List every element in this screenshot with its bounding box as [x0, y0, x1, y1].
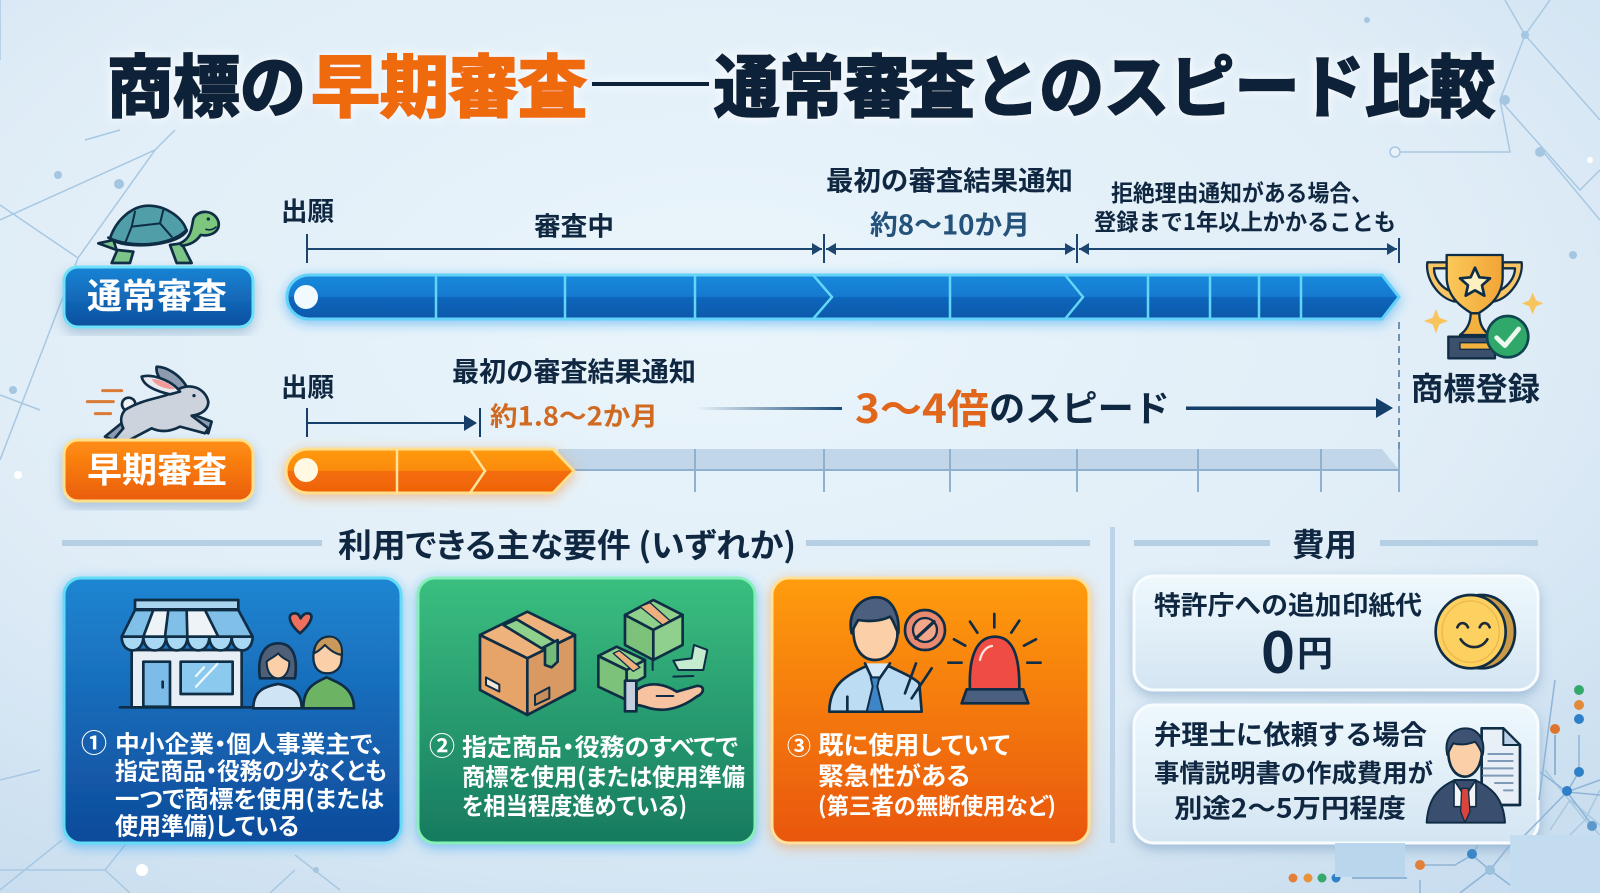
icon: store and couple: [120, 600, 354, 708]
panel: attorney fee: 別途2〜5万円程度: [1174, 788, 1406, 826]
corner patches: [1288, 835, 1600, 893]
panel: requirement 2: を相当程度進めている): [462, 786, 687, 822]
timeline labels: normal: 審査中: [534, 206, 614, 244]
label: trademark registration: 商標登録: [1411, 364, 1540, 410]
label: fast examination: 早期審査: [87, 442, 227, 494]
timeline labels: fast: [281, 350, 696, 434]
title: 商標の: [107, 32, 306, 132]
timeline labels: normal: [281, 160, 1396, 244]
timeline labels: normal: 最初の審査結果通知: [826, 160, 1073, 198]
bar: normal examination timeline: [287, 275, 1399, 319]
panel: requirement 1: ①: [81, 724, 107, 760]
panel: requirement 3: ③: [787, 726, 811, 762]
panel: requirement 2: 指定商品・役務のすべてで: [462, 728, 738, 762]
timeline labels: normal: 出願: [281, 192, 334, 228]
speed comparison arrow: 3〜4倍: [855, 377, 989, 435]
remaining gray track: [558, 449, 1399, 492]
panel: requirement 1: 中小企業・個人事業主で、: [115, 724, 384, 760]
timeline labels: fast: 約1.8〜2か月: [490, 396, 658, 434]
label: normal examination: 通常審査: [87, 268, 227, 320]
timeline labels: fast: 出願: [281, 368, 334, 404]
panel: requirement 1: [64, 578, 401, 843]
divider: [1110, 527, 1115, 843]
panel: requirement 2: ②: [429, 726, 455, 764]
icon: attorney with document: [1427, 728, 1520, 823]
panel: stamp fee: [1134, 576, 1538, 690]
panel: attorney fee: 事情説明書の作成費用が: [1154, 754, 1433, 790]
icon: boxes and hand: [480, 600, 707, 715]
icon: trophy: [1424, 255, 1543, 358]
panel: requirement 1: 一つで商標を使用(または: [115, 780, 384, 814]
title: 通常審査とのスピード比較: [714, 32, 1495, 132]
panel: attorney fee: [1134, 705, 1538, 843]
section heading: cost: [1134, 520, 1538, 566]
timeline labels: normal: 約8〜10か月: [870, 204, 1030, 242]
label: fast examination: [64, 440, 253, 501]
panel: requirement 1: 使用準備)している: [115, 806, 299, 842]
panel: requirement 2: [418, 578, 755, 843]
panel: attorney fee: 弁理士に依頼する場合: [1154, 714, 1427, 752]
timeline bracket: fast: [307, 408, 480, 437]
panel: requirement 3: [772, 578, 1089, 843]
timeline brackets: normal: [307, 234, 1399, 263]
icon: rabbit: [87, 367, 212, 445]
panel: requirement 3: (第三者の無断使用など): [818, 787, 1056, 821]
timeline labels: normal: 拒絶理由通知がある場合、: [1111, 174, 1373, 208]
panel: stamp fee: 円: [1297, 625, 1333, 677]
icon: turtle: [98, 206, 219, 263]
title: 早期審査: [311, 32, 587, 132]
label: normal examination: [64, 267, 253, 327]
bar: fast examination timeline: [286, 449, 574, 493]
corner decoration: network nodes: [1520, 680, 1600, 840]
panel: requirement 3: 既に使用していて: [818, 726, 1010, 762]
speed comparison arrow: のスピード: [989, 380, 1170, 432]
timeline labels: fast: 最初の審査結果通知: [452, 350, 696, 390]
panel: stamp fee: 0: [1261, 608, 1295, 690]
section heading: cost: 費用: [1292, 520, 1357, 566]
timeline labels: normal: 登録まで1年以上かかることも: [1094, 203, 1396, 237]
panel: requirement 1: 指定商品・役務の少なくとも: [115, 752, 387, 786]
icon: smiling coin: [1436, 595, 1515, 668]
panel: requirement 3: 緊急性がある: [818, 757, 970, 793]
speed comparison arrow: [696, 377, 1393, 435]
panel: requirement 2: 商標を使用(または使用準備: [462, 758, 745, 792]
panel: stamp fee: 特許庁への追加印紙代: [1154, 586, 1422, 622]
section heading: requirements: 利用できる主な要件 (いずれか): [338, 519, 796, 567]
title: [107, 32, 1495, 132]
dashed guide: [1398, 322, 1400, 449]
section heading: requirements: [62, 519, 1090, 567]
icon: businessman and siren: [829, 597, 1041, 712]
